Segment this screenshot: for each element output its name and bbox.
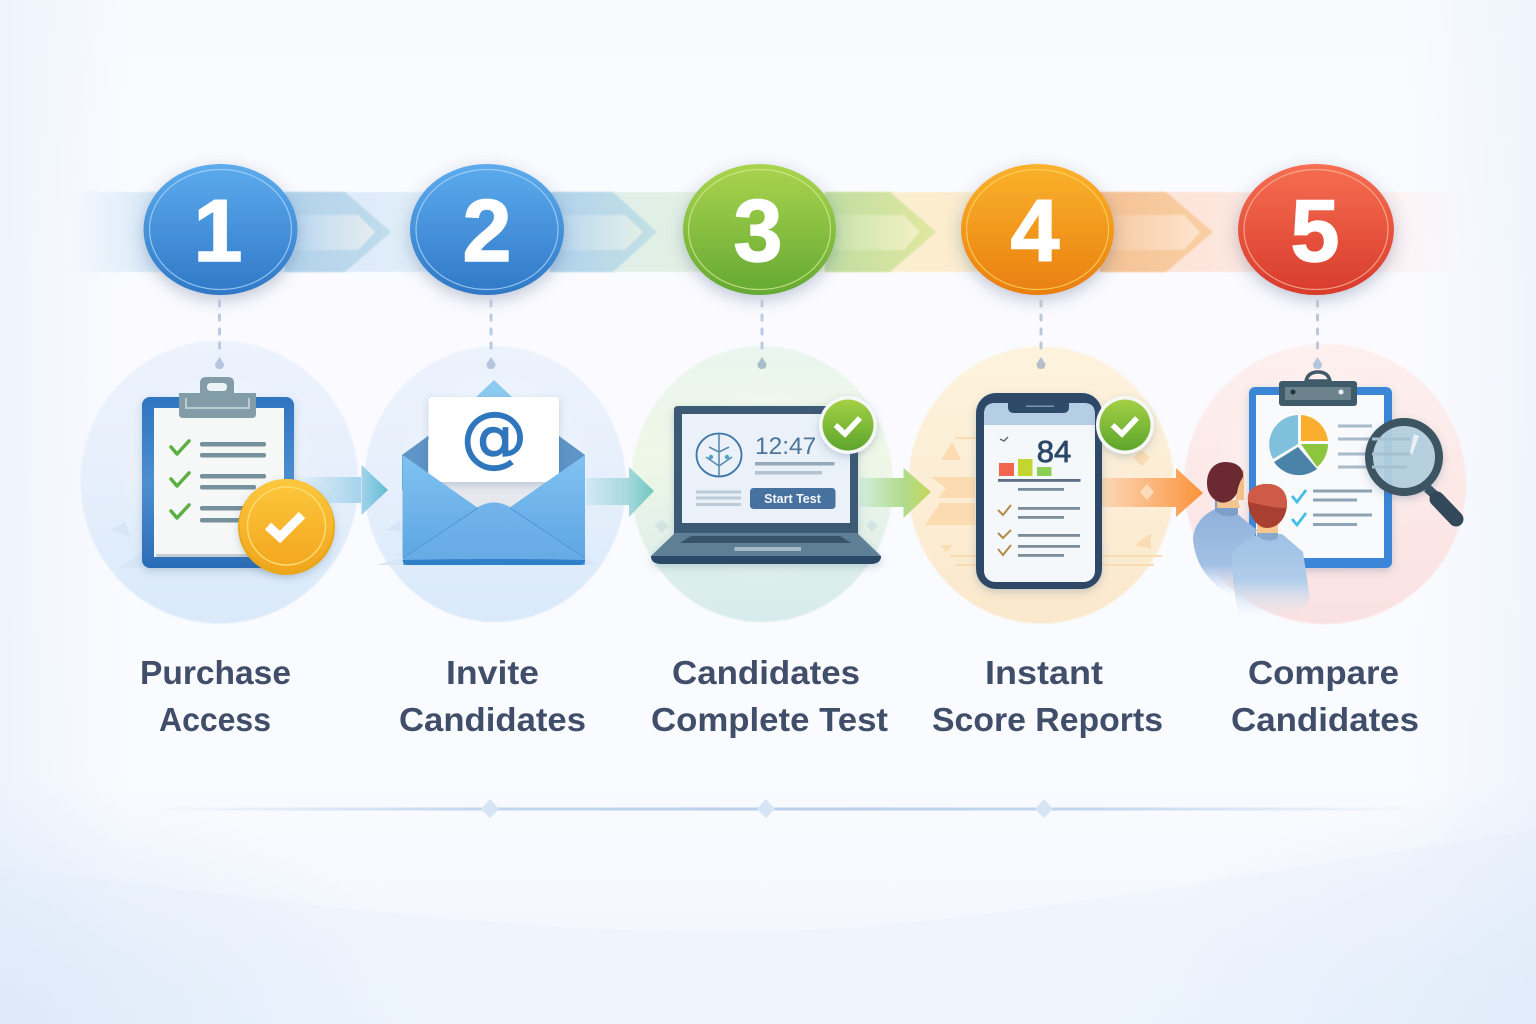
step label 3: Complete Test — [651, 701, 888, 738]
step 3 icon: laptop with timer and start test — [651, 396, 931, 564]
number badge 3: 3 — [734, 181, 782, 280]
footer divider with diamonds — [150, 799, 1420, 818]
number badge 3 — [683, 164, 836, 295]
number badge 1 — [144, 164, 298, 295]
step label 2 — [399, 654, 586, 738]
step label 5: Candidates — [1231, 701, 1419, 738]
step label 2: Candidates — [399, 701, 586, 738]
dashed connectors — [215, 301, 1322, 369]
magnifier — [1369, 422, 1456, 519]
progress band — [70, 192, 1470, 272]
number badge 1: 1 — [194, 181, 242, 280]
number badge 4 — [961, 164, 1114, 295]
number badge 2 — [410, 164, 564, 295]
step label 1 — [140, 654, 291, 738]
number badge 5 — [1238, 164, 1394, 295]
number badge 2: 2 — [463, 181, 511, 280]
step 4 icon: phone with score report: 84 — [1037, 434, 1071, 469]
step 1 icon: clipboard with gold check coin — [112, 377, 388, 575]
step 2 icon: open envelope with email card — [376, 380, 654, 565]
step label 4 — [932, 654, 1163, 738]
step circle backgrounds — [80, 340, 1466, 624]
step 3 icon: laptop with timer and start test: 12:47 — [755, 433, 816, 460]
step label 5: Compare — [1248, 654, 1399, 691]
step label 2: Invite — [446, 654, 539, 691]
step 3 icon: laptop with timer and start test: Start Test — [764, 492, 822, 506]
step label 3 — [651, 654, 888, 738]
step 4 icon: phone with score report — [925, 393, 1203, 589]
step label 1: Purchase — [140, 654, 291, 691]
number badge 4: 4 — [1011, 181, 1060, 280]
step label 5 — [1231, 654, 1419, 738]
step label 4: Instant — [985, 654, 1103, 691]
person front — [1232, 484, 1310, 618]
step label 1: Access — [159, 701, 271, 738]
person rear — [1193, 462, 1257, 596]
step 2 icon: open envelope with email card: @ — [461, 398, 527, 475]
report clipboard — [1249, 372, 1392, 568]
number badge 5: 5 — [1291, 181, 1339, 280]
step label 3: Candidates — [672, 654, 860, 691]
chevron arrows on the band — [285, 192, 1213, 272]
step 5 icon: report clipboard, magnifier and two people — [1193, 372, 1456, 618]
step label 4: Score Reports — [932, 701, 1163, 738]
